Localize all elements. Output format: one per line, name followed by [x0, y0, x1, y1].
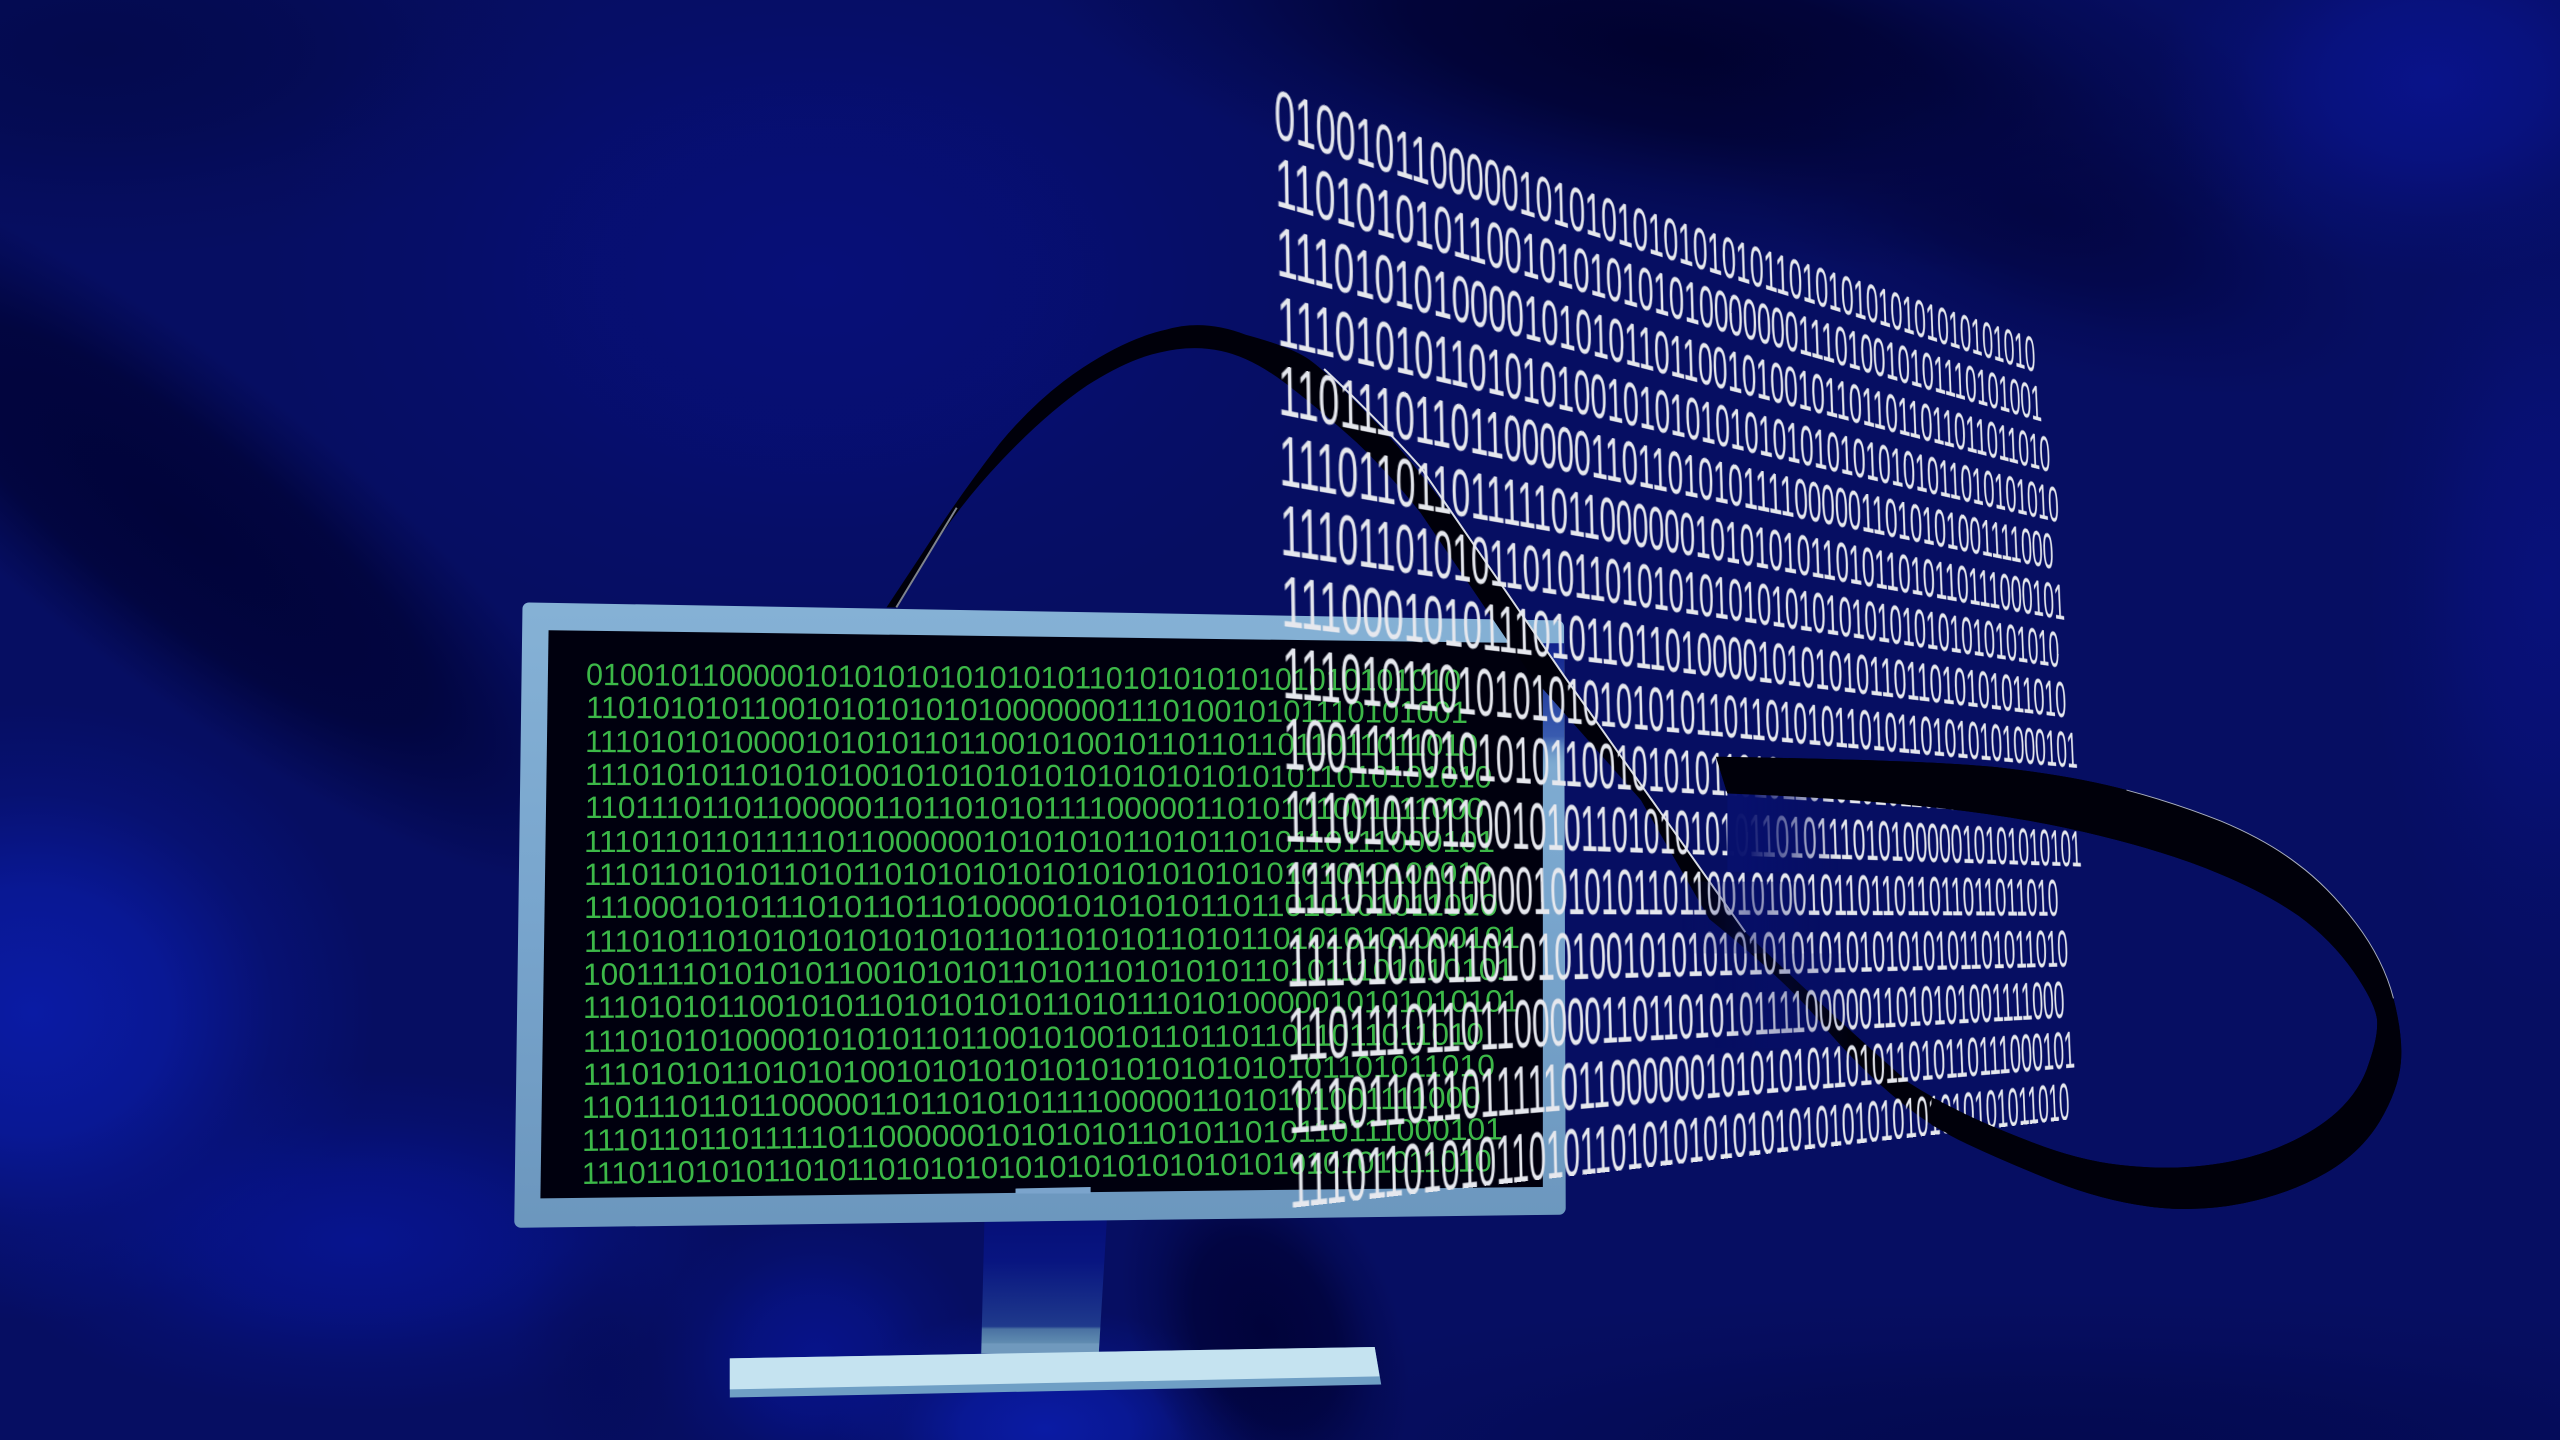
green binary text on screen: 111010110101010101010101101101010110101101010101000101 — [584, 920, 1520, 959]
ribbon loop shape — [1716, 757, 2401, 1209]
monitor stand neck — [981, 1218, 1107, 1353]
green binary text on screen: 1110101011010101001010101010101010101010101101011010 — [583, 1048, 1495, 1092]
ribbon rim highlight on the loop — [2127, 790, 2393, 998]
ribbon highlight line — [1324, 369, 1745, 932]
green binary text on screen: 0100101100000101010101010101011010101010101010101010 — [586, 657, 1461, 698]
green binary text on screen: 100111101010101100101010110101101010101101011101010101 — [583, 952, 1514, 992]
black ribbon cable — [887, 325, 2401, 1209]
bezel notch — [1016, 1187, 1091, 1193]
green binary text on screen: 1110001010111010110110100001010101011011010101011010 — [584, 887, 1498, 925]
green binary text on screen: 111011010101101011010101010101010101010101010101011010 — [582, 1143, 1492, 1191]
white binary text wall in perspective — [1274, 88, 2122, 1208]
green binary text on screen: 11011101101100000110110101011110000011010101001111000 — [582, 1080, 1481, 1125]
green binary text on screen: 111011011011111011000000101010101101011010110111000101 — [584, 824, 1495, 859]
monitor bezel — [521, 609, 1564, 1221]
fade where text dips behind the ribbon — [1682, 793, 1861, 1048]
green binary text on screen: 11101101010110101101010101010101010101010101010101010 — [584, 856, 1492, 892]
green binary text on screen: 11101010100001010101101100101001011011011011011011010 — [585, 724, 1478, 763]
green binary text on screen: 11101010100001010101101100101001011011011011011011010 — [583, 1016, 1484, 1059]
green binary text on screen: 11011101101100000110110101011110000011010101001111000 — [585, 790, 1484, 826]
monitor stand base — [730, 1347, 1381, 1398]
green binary text on screen: 1101010101100101010101010000000111010010101110101001 — [586, 690, 1468, 730]
monitor screen — [540, 630, 1543, 1198]
green binary text on screen: 111011011011111011000000101010101101011010110111000101 — [582, 1111, 1503, 1158]
green binary text on screen: 1110101011001010110101010101101011101010000010101010101 — [583, 983, 1520, 1025]
green binary text on screen — [582, 657, 1520, 1191]
ribbon lower grey edge near the monitor — [896, 508, 957, 607]
green binary text on screen: 11101010110101010010101010101010101010101011010101010 — [585, 757, 1492, 795]
